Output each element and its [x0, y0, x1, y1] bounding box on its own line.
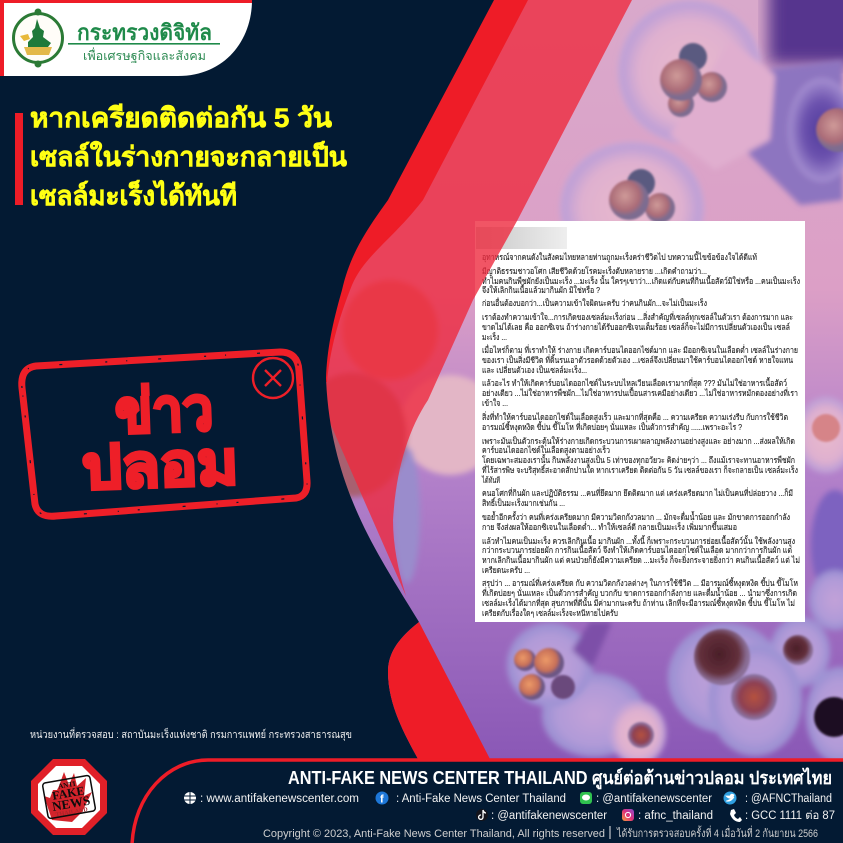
icon: globe	[184, 792, 196, 804]
logo wordmark: FAKE	[51, 783, 86, 803]
instagram handle: : afnc_thailand	[638, 810, 713, 822]
article text: สิทธิ์เป็นมะเร็งมากเช่นกัน ...	[482, 497, 565, 508]
article text: มะเร็ง ...	[482, 332, 507, 342]
footer panel	[132, 760, 843, 843]
background photo: cancer cells	[297, 0, 843, 765]
ministry name: กระทรวงดิจิทัล	[77, 20, 212, 45]
ministry logo panel	[0, 0, 252, 76]
logo wordmark: NEWS	[51, 793, 91, 814]
stamp text	[81, 375, 239, 502]
article text: กว่ากระบวนการย่อยผัก การกินเนื้อสัตว์ จึงทำให้เกิดคาร์บอนไดออกไซด์ในเลือด มากกว่าการกินผัก แต่	[482, 544, 792, 555]
article screenshot card	[475, 221, 805, 622]
article text: มีญาติธรรมชาวอโศก เสียชีวิตด้วยโรคมะเร็งตับหลายราย ...เกิดคำถามว่า...	[482, 266, 707, 276]
website: : www.antifakenewscenter.com	[200, 793, 359, 805]
article text: ที่เกิดบ่อยๆ นั่นแหละ เป็นตัวการสำคัญ บวกกับ ขาดการออกกำลังกาย และดื่มน้ำน้อย ... นำมาซึ่งการเกิด	[482, 587, 797, 598]
article text: คาร์บอนไดออกไซด์ในเลือดสูงตามอย่างเร็ว	[482, 445, 610, 456]
icon: line	[580, 792, 592, 804]
phone number: : GCC 1111 ต่อ 87	[745, 810, 835, 822]
article text: เข้าใจ ...	[482, 398, 508, 408]
solid red diagonal band	[322, 0, 528, 382]
anti-fake news stop logo	[31, 759, 107, 835]
line handle: : @antifakenewscenter	[596, 793, 712, 805]
article text: กาย จึงส่งผลให้ออกซิเจนในเลือดต่ำ... ทำให้เซลล์ดี กลายเป็นมะเร็ง เพิ่มมากขึ้นเสมอ	[482, 521, 737, 532]
stamp text: ปลอม	[81, 429, 239, 502]
translucent red diagonal overlay	[320, 0, 632, 596]
icon: tiktok	[476, 809, 488, 821]
article text: สิ่งที่ทำให้คาร์บอนไดออกไซด์ในเลือดสูงเร็ว และมากที่สุดคือ ... ความเครียด ความเร่งรีบ กับการใช้ชีวิต	[482, 411, 788, 423]
fake news stamp	[22, 352, 307, 516]
article text: แล้วอะไร ทำให้เกิดคาร์บอนไดออกไซด์ในระบบไหลเวียนเลือดเรามากที่สุด ??? มันไม่ใช่อาหารเนื้อสัตว์	[482, 377, 787, 389]
headline: หากเครียดติดต่อกัน 5 วัน	[30, 103, 333, 133]
blurred profile header	[476, 227, 567, 249]
icon: phone	[730, 809, 742, 822]
tiktok handle: : @antifakenewscenter	[491, 810, 607, 822]
red curved shape at lower centre	[388, 622, 490, 759]
icon: facebook: f	[380, 794, 384, 806]
icon: instagram	[622, 809, 634, 821]
article text	[481, 251, 800, 618]
stamp text: ข่าว	[114, 375, 214, 446]
article text: ขาดไม่ได้เลย คือ ออกซิเจน ถ้าร่างกายได้รับออกซิเจนเต็มร้อย เซลล์ก็จะไม่มีการเปลี่ยนตัวเองเป็น เซลล์	[482, 321, 790, 332]
article text: เครียดนะครับ ...	[482, 565, 530, 575]
icon: facebook	[376, 792, 388, 806]
article text: เพราะมันเป็นตัวกระตุ้นให้ร่างกายเกิดกระบวนการเผาผลาญพลังงานอย่างสูงและ อย่างมาก ...ส่งผลให้เกิด	[482, 436, 795, 447]
headline: เซลล์มะเร็งได้ทันที	[30, 178, 237, 211]
icon: twitter	[724, 792, 736, 804]
article text: และ เปลี่ยนตัวเอง เป็นเซลล์มะเร็ง...	[482, 364, 587, 375]
logo wordmark: THAILAND	[55, 807, 89, 819]
article text: จึงให้เลิกกินเนื้อแล้วมากินผัก มิใช่หรือ ?	[482, 284, 600, 295]
red hand	[44, 772, 92, 822]
twitter handle: : @AFNCThailand	[745, 793, 832, 805]
stamp cross icon	[253, 358, 293, 398]
navy left panel	[0, 0, 494, 759]
logo wordmark	[42, 775, 96, 820]
article text: เครียดกับเรื่องใดๆ เซลล์มะเร็งจะหนีหายไปครับ	[482, 607, 618, 618]
ministry tagline: เพื่อเศรษฐกิจและสังคม	[83, 47, 206, 63]
copyright: Copyright © 2023, Anti-Fake News Center Thailand, All rights reserved	[263, 828, 605, 840]
facebook handle: : Anti-Fake News Center Thailand	[396, 793, 566, 805]
headline	[15, 103, 348, 211]
article text: ก่อนอื่นต้องบอกว่า...เป็นความเข้าใจผิดนะครับ ว่าคนกินผัก...จะไม่เป็นมะเร็ง	[482, 297, 707, 308]
logo wordmark: ANTI	[58, 780, 76, 791]
ministry emblem	[14, 8, 62, 68]
article text: ได้ทันที	[481, 475, 500, 485]
source credit: หน่วยงานที่ตรวจสอบ : สถาบันมะเร็งแห่งชาติ กรมการแพทย์ กระทรวงสาธารณสุข	[30, 727, 352, 741]
article text: อุทาหรณ์จากคนดังในสังคมไทยหลายท่านถูกมะเร็งคร่าชีวิตไป บทความนี้ไขข้อข้องใจได้ดีแท้	[482, 251, 757, 263]
article text: อารมณ์ซี้หงุดหงิด ขี้บ่น ขี้โมโห ที่เกิดบ่อยๆ นั่นแหละ เป็นตัวการสำคัญ ......เพราะอะไร ?	[482, 421, 742, 433]
headline: เซลล์ในร่างกายจะกลายเป็น	[30, 139, 348, 172]
article text: ขอย้ำอีกครั้งว่า คนที่เคร่งเครียดมาก มีความวิตกกังวลมาก ... มักจะดื่มน้ำน้อย และ มักขาดการออกกำลัง	[482, 511, 790, 522]
